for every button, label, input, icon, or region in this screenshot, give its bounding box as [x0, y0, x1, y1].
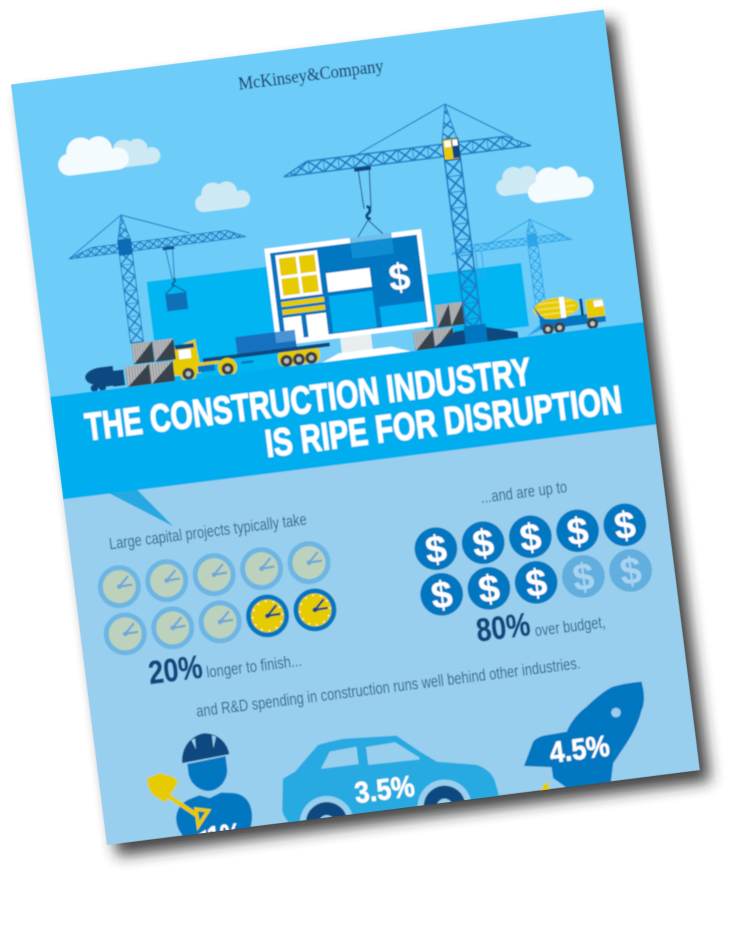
dollar coins: $: [476, 568, 502, 612]
dollar coins: $: [612, 504, 638, 548]
background building: [146, 262, 530, 382]
dollar coins: $: [523, 562, 549, 606]
stat: 80% over budget: 80%: [474, 606, 532, 649]
worker: under 1%: <1%: [192, 817, 243, 856]
left crane: [68, 214, 246, 344]
stat: 20% longer: [148, 654, 302, 685]
R&D text: and R&D spending in construction runs well behind other industries.: [195, 655, 581, 721]
intro text: budget: ...and are up to: [480, 478, 568, 507]
helmet: [179, 730, 230, 763]
banner pointer: [110, 489, 174, 526]
stat: 20% longer: longer to finish...: [205, 652, 303, 682]
body: [176, 792, 253, 836]
worker: under 1%: [146, 732, 253, 836]
dollar coins: $: [570, 556, 597, 600]
clocks: [98, 541, 336, 655]
crane base: [432, 324, 519, 350]
title: [82, 356, 623, 458]
rocket: 4.5%: [524, 681, 645, 790]
dollar symbol: $: [386, 256, 413, 300]
dollar coins: $: [517, 516, 544, 560]
dollar coins: $: [618, 550, 644, 594]
stat: 20% longer: 20%: [146, 649, 204, 691]
main crane: [283, 103, 532, 327]
flatbed truck: [172, 329, 330, 381]
car: 3.5%: 3.5%: [353, 770, 416, 810]
left containers: [122, 338, 179, 388]
title: IS RIPE FOR DISRUPTION: [263, 378, 624, 466]
monitor stand: [322, 334, 411, 364]
head: [187, 756, 230, 793]
dollar coins: $: [429, 574, 455, 618]
shovel: [146, 768, 210, 832]
title banner: [50, 322, 656, 499]
right containers: [410, 302, 468, 352]
far crane: [450, 218, 573, 337]
clouds: [57, 136, 594, 213]
logo: McKinsey&Company: [237, 56, 385, 94]
rocket: 4.5%: 4.5%: [548, 730, 611, 770]
crane cab: [442, 138, 461, 161]
stat: 80% over budget: over budget,: [534, 614, 606, 640]
cement mixer truck: [532, 296, 606, 336]
dollar coins: $: [423, 528, 449, 572]
title: THE CONSTRUCTION INDUSTRY: [83, 351, 534, 449]
dollar coins: $: [470, 522, 496, 566]
car: 3.5%: [282, 735, 500, 822]
dollar coins: $: [565, 510, 591, 554]
monitor: [264, 229, 436, 369]
intro text: time: Large capital projects typically take: [108, 511, 308, 554]
dollar coins: [412, 501, 655, 619]
stat: 80% over budget: [476, 612, 606, 642]
dark mixer silhouette: [84, 364, 126, 393]
